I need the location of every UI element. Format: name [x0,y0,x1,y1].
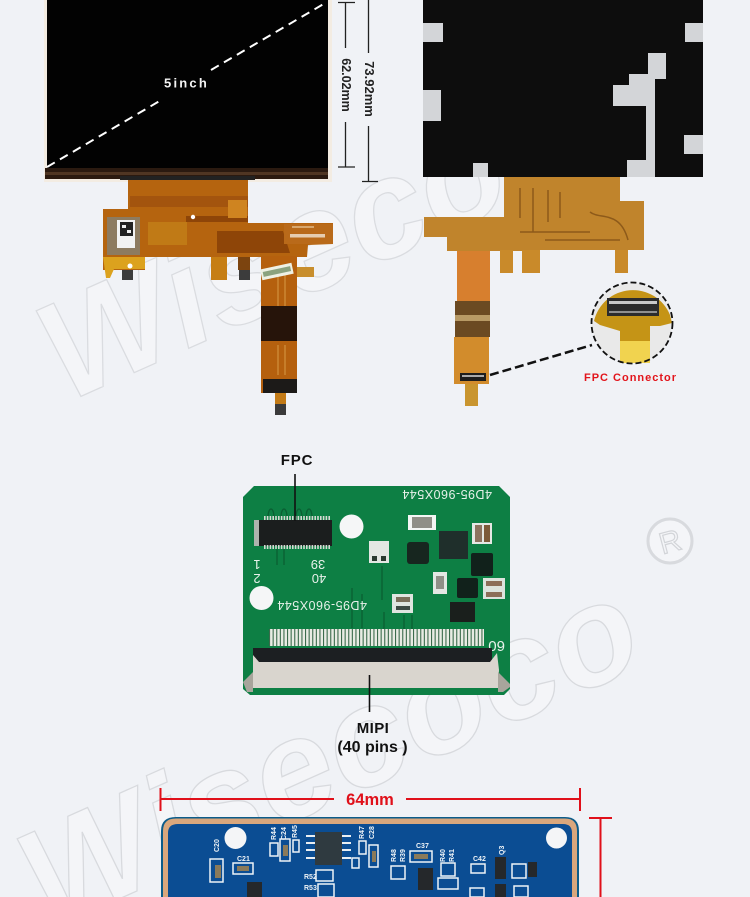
panel: LCD back view [423,0,703,177]
silk labels: R48 [391,849,398,862]
MIPI gold pins [269,629,484,646]
silk labels: 1 [253,557,261,572]
dimension: 73.92mm [362,0,378,182]
silk labels: C20 [214,839,221,852]
pointer: MIPI [368,675,370,712]
main chip [315,832,342,865]
dimension: 62.02mm: 62.02mm [339,58,353,112]
silk labels: R47 [359,826,366,839]
LCD frame [44,0,332,182]
label: MIPI: MIPI [357,720,389,737]
small components [210,839,528,897]
FPC connector [254,518,332,547]
components [369,515,505,622]
dimension: 64mm: 64mm [346,791,394,809]
dimension: board height [589,818,612,897]
silk labels: 60 [488,637,505,654]
board with copper edge [161,817,579,897]
dashed leader [490,345,592,375]
MIPI connector [243,648,510,692]
FPC tail [457,251,490,301]
silk labels: C28 [369,826,376,839]
cutouts [423,23,703,177]
label: pins: (40 pins ) [337,739,408,756]
label: FPC: FPC [281,452,313,469]
silk labels: R53 [304,885,317,892]
silk labels: 40 [312,571,326,586]
callout: FPC connector detail [490,282,677,384]
silk labels: 39 [311,557,325,572]
FPC body [424,177,644,251]
panel: LCD front view [44,0,332,182]
blue control board [161,817,579,897]
silk labels: R40 [440,849,447,862]
FPC tail sticker [260,263,294,280]
connector label: FPC Connector [584,372,677,384]
FPC tabs [500,250,513,273]
silk labels: R45 [292,825,299,838]
silk labels: R44 [271,827,278,840]
dimension: 64mm [160,788,580,811]
FPC yellow corner [103,257,145,278]
silk labels: C42 [473,856,486,863]
mounting holes [224,827,246,849]
board [243,486,510,695]
silk labels [253,487,505,654]
silk labels: 4D95-960X544 [277,598,367,612]
mounting holes [340,514,364,538]
connector on tail [460,373,486,381]
dimension: 62.02mm [338,2,355,167]
FPC tabs [211,257,227,280]
dimension: 73.92mm: 73.92mm [362,61,377,117]
flexible circuit: front [103,180,333,415]
traces [268,509,412,630]
flexible circuit: back [424,177,644,406]
FPC tail [261,256,297,393]
LCD black screen [47,0,328,169]
watermark: registered mark [648,519,692,563]
silk labels: 2 [253,571,261,586]
silk labels: Q3 [499,846,506,855]
pointer: FPC [294,474,296,521]
detail circle [592,283,672,363]
shield with QR label [107,217,140,255]
back cover [423,0,703,177]
silk labels: C24 [281,827,288,840]
silk labels: 4D95-960X544 [402,487,492,501]
silk labels: C21 [237,856,250,863]
FPC body [103,180,333,270]
silk labels: R41 [449,849,456,862]
LCD bottom edge [45,168,328,179]
silk labels: R52 [304,874,317,881]
watermark: registered mark: R [656,524,685,561]
green adapter board [243,486,510,695]
watermark: upper: Wisecoco [14,18,681,430]
silk labels: C37 [416,843,429,850]
diagonal size line [47,2,327,167]
silk labels: R39 [400,849,407,862]
silk labels [214,825,506,892]
size label: 5inch [164,76,209,90]
